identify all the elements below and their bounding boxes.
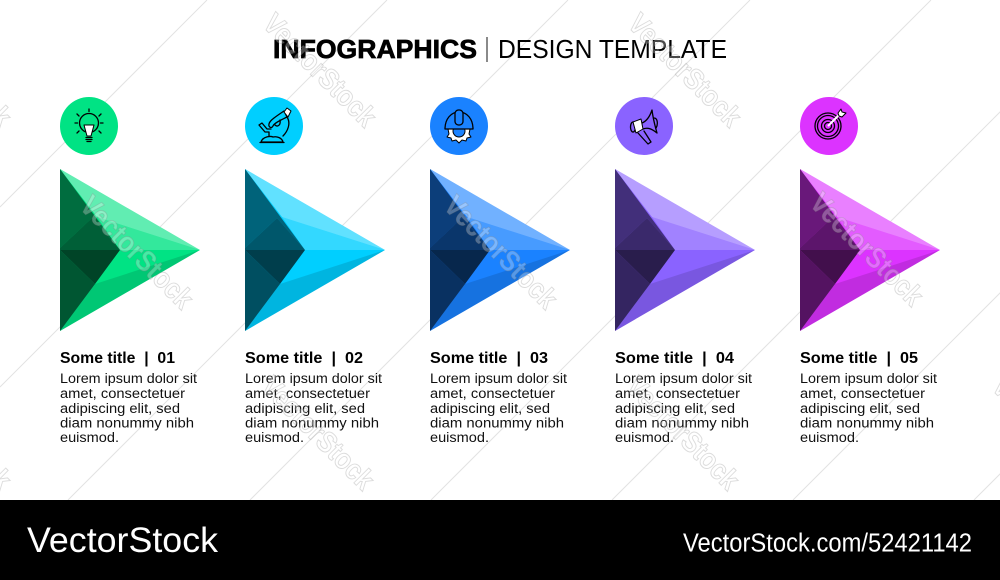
step 4 text: Some title | 04 [615, 350, 734, 367]
step 3 text [430, 350, 567, 445]
step 5 arrow [800, 169, 940, 331]
step 2 text: Some title | 02 [245, 350, 363, 367]
step 5 text: euismod. [800, 430, 859, 445]
step 5 text: adipiscing elit, sed [800, 401, 920, 416]
step 5 text: amet, consectetuer [800, 386, 926, 401]
step 5 text: diam nonummy nibh [800, 416, 934, 430]
step 3 text: amet, consectetuer [430, 386, 556, 401]
title: DESIGN TEMPLATE [498, 34, 727, 64]
step 3 text: euismod. [430, 430, 489, 445]
step 4 text: diam nonummy nibh [615, 416, 749, 430]
step 3 text: diam nonummy nibh [430, 416, 564, 430]
step 3 text: adipiscing elit, sed [430, 401, 550, 416]
step 1 text: adipiscing elit, sed [60, 401, 180, 416]
step 4 text: euismod. [615, 430, 674, 445]
step 5 text: Some title | 05 [800, 350, 918, 367]
step 4 text: adipiscing elit, sed [615, 401, 735, 416]
watermarks: VectorStock [619, 371, 746, 497]
step 1 text: Lorem ipsum dolor sit [60, 371, 197, 386]
step 1 arrow [60, 169, 200, 331]
step 4 text: amet, consectetuer [615, 386, 741, 401]
title: INFOGRAPHICS [273, 34, 477, 64]
step 1 text: diam nonummy nibh [60, 416, 194, 430]
watermarks: VectorStock [437, 190, 564, 316]
step 1 text: Some title | 01 [60, 350, 175, 367]
step 5 icon: target with arrow [800, 97, 858, 155]
step 4 icon: megaphone [615, 97, 673, 155]
footer url: VectorStock.com/52421142 [683, 530, 972, 558]
footer bar [0, 500, 1000, 580]
step 2 text: amet, consectetuer [245, 386, 371, 401]
step 1 text [60, 350, 197, 445]
step 2 text: euismod. [245, 430, 304, 445]
step 2 text [245, 350, 382, 445]
step 1 text: euismod. [60, 430, 119, 445]
step 2 text: Lorem ipsum dolor sit [245, 371, 382, 386]
step 2 icon: microscope [245, 97, 303, 155]
step 1 text: amet, consectetuer [60, 386, 186, 401]
step 5 text: Lorem ipsum dolor sit [800, 371, 937, 386]
step 5 text [800, 350, 937, 445]
watermarks: VectorStock [256, 8, 383, 134]
step 3 icon: helmet and gear [430, 97, 488, 155]
watermarks: VectorStock [73, 190, 200, 316]
step 2 text: diam nonummy nibh [245, 416, 379, 430]
step 2 text: adipiscing elit, sed [245, 401, 365, 416]
title [273, 34, 727, 64]
step 4 text [615, 350, 752, 445]
step 3 text: Some title | 03 [430, 350, 548, 367]
step 3 text: Lorem ipsum dolor sit [430, 371, 567, 386]
watermarks: VectorStock [621, 8, 748, 134]
step 4 arrow [615, 169, 755, 331]
step 1 icon: light bulb [60, 97, 118, 155]
watermarks: VectorStock [254, 371, 381, 497]
step 2 arrow [245, 169, 385, 331]
step 3 arrow [430, 169, 570, 331]
footer logo: VectorStock [27, 521, 219, 560]
step 4 text: Lorem ipsum dolor sit [615, 371, 752, 386]
watermarks: VectorStock [803, 187, 930, 313]
